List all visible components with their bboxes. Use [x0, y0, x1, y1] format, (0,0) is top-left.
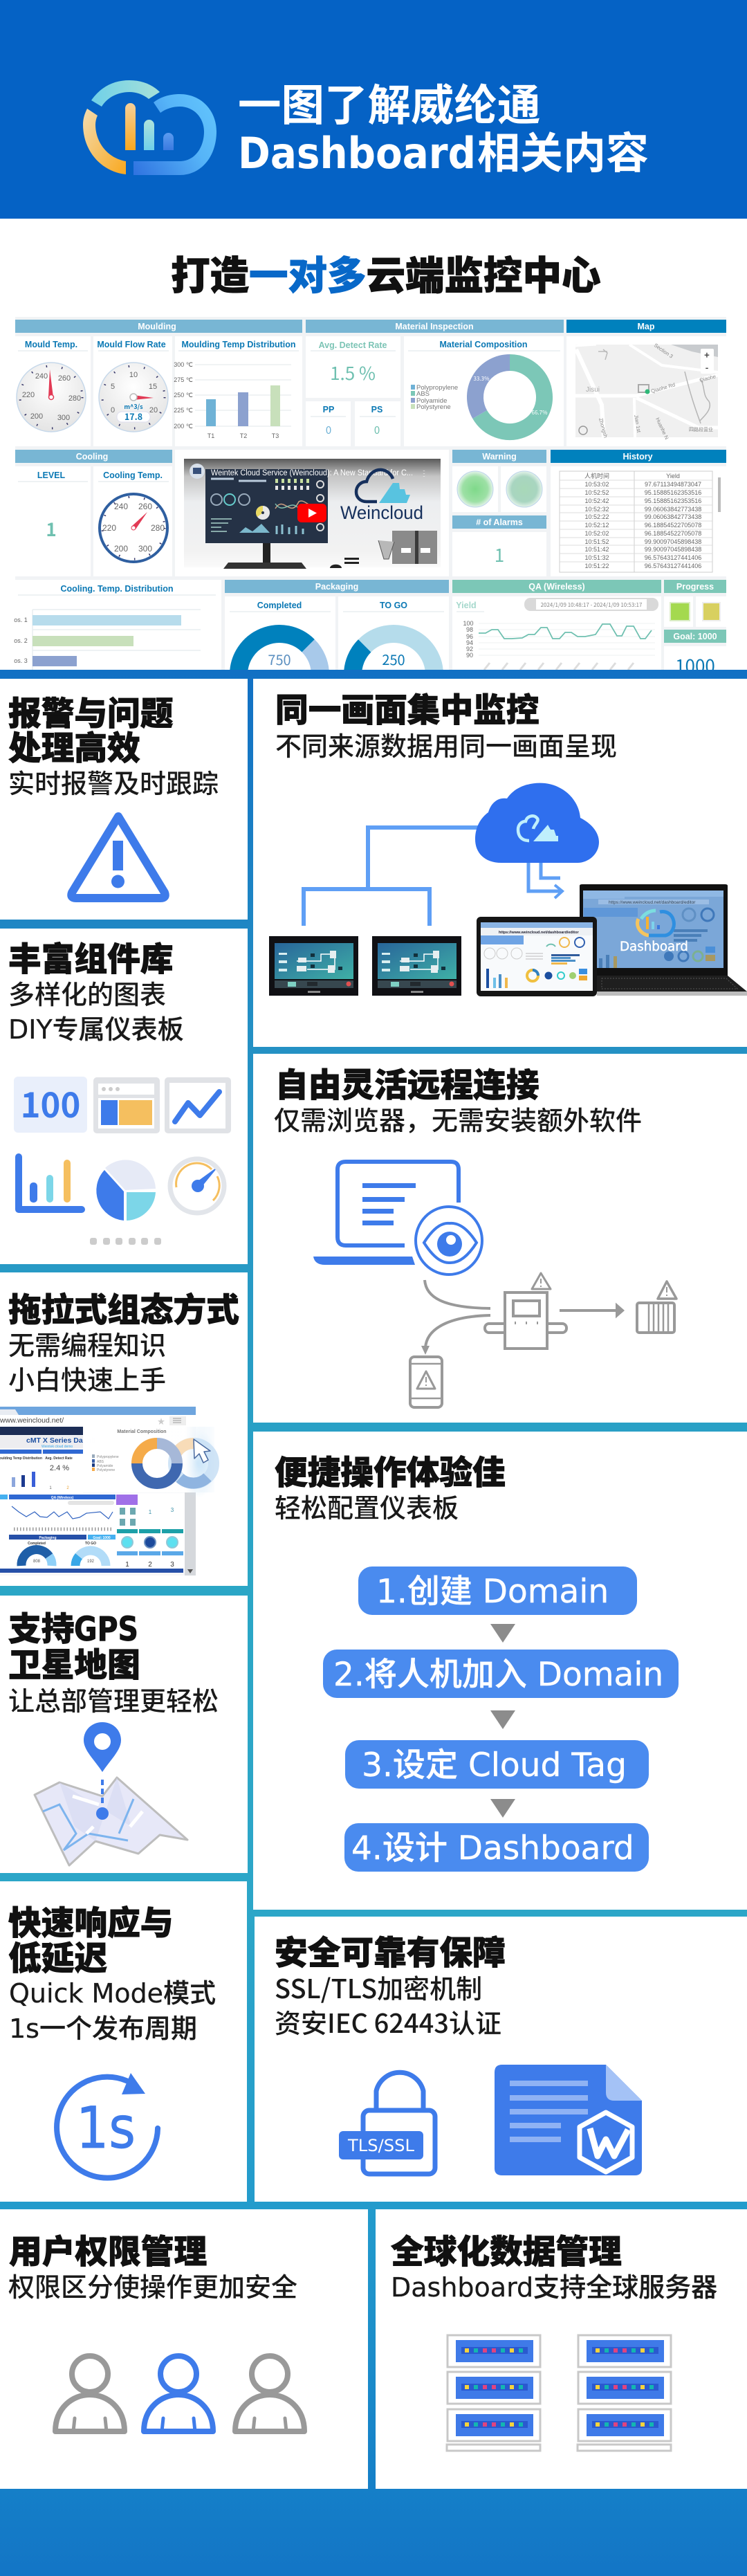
cell titles: Material Composition	[439, 340, 528, 349]
line chart: QA yield	[463, 598, 658, 670]
panel: GPS map	[0, 1596, 248, 1873]
browser screenshot: Weintek cloud demo	[42, 1445, 73, 1449]
history table: 95.15885162353516	[645, 489, 701, 496]
heading: 报警与问题	[8, 687, 173, 735]
icon: warning triangle	[71, 816, 165, 898]
heading: 便捷操作体验佳	[275, 1446, 506, 1494]
warning lights: 1	[495, 542, 504, 567]
floating popup: material composition	[83, 1427, 218, 1498]
history table: 10:51:22	[584, 563, 609, 569]
history table	[560, 471, 721, 572]
bar chart: moulding temp	[174, 361, 291, 439]
cell titles	[18, 340, 560, 612]
icon: line widget	[165, 1077, 231, 1133]
gauge: cooling temp: 300	[138, 544, 152, 554]
heading: 低延迟	[8, 1932, 107, 1980]
bar chart: moulding temp: 200 ℃	[174, 423, 193, 430]
bar chart: moulding temp: 300 ℃	[174, 361, 193, 368]
gauge: mould temp: 280	[68, 394, 81, 403]
subtext	[8, 974, 184, 1045]
video thumbnail: Weintek Cloud Service (Weincloud): A New Standard for C...	[211, 469, 413, 477]
line chart: QA yield: 92	[466, 646, 473, 652]
cell titles: Moulding Temp Distribution	[181, 340, 296, 349]
cell titles: Cooling Temp.	[103, 471, 163, 480]
level value: 1	[46, 516, 57, 542]
line chart: QA yield: 96	[466, 633, 473, 640]
icon: users	[55, 2356, 304, 2431]
browser screenshot: 2	[148, 1561, 152, 1569]
title: Dashboard	[238, 128, 476, 179]
progress: 1000	[675, 652, 715, 678]
cell titles: Cooling. Temp. Distribution	[61, 584, 173, 594]
bar chart: cooling temp distribution: os. 1	[14, 616, 28, 623]
line chart: QA yield: 98	[466, 626, 473, 633]
floating popup: material composition: Polyamide	[97, 1464, 113, 1468]
panel: drag and drop	[0, 1272, 248, 1586]
history table: 10:51:32	[584, 554, 609, 561]
progress	[670, 603, 720, 678]
history table: 10:53:02	[584, 481, 609, 488]
cell titles: Mould Temp.	[25, 340, 77, 349]
line chart: QA yield: 94	[466, 639, 473, 646]
browser screenshot: 1	[49, 1486, 52, 1490]
gauges: packaging: 750	[268, 649, 291, 669]
cell titles: PP	[323, 405, 334, 414]
step 1	[358, 1566, 637, 1615]
browser screenshot: Completed	[28, 1542, 46, 1546]
history table: 96.57643127441406	[645, 563, 701, 569]
browser screenshot: 808	[33, 1560, 41, 1564]
browser screenshot: Avg. Detect Rate	[45, 1456, 73, 1461]
gauge: flow rate: m^3/s	[124, 402, 143, 411]
step 3: 3.设定 Cloud Tag	[362, 1746, 627, 1784]
history table: 96.18854522705078	[645, 530, 701, 537]
history table: 10:52:02	[584, 530, 609, 537]
heading: 全球化数据管理	[391, 2225, 622, 2273]
donut: material composition: Polypropylene	[416, 384, 458, 392]
gauge: flow rate: 17.8	[124, 410, 142, 423]
heading	[8, 1602, 140, 1686]
cell titles: PS	[371, 405, 382, 414]
subtext: 让总部管理更轻松	[8, 1680, 219, 1718]
laptop: https://www.weincloud.net/dashboard/editor	[609, 900, 696, 905]
map: Zhongsh	[598, 417, 609, 439]
donut: material composition: ABS	[416, 390, 430, 398]
browser screenshot: 3	[171, 1507, 174, 1513]
detect rate values	[326, 367, 379, 434]
browser screenshot: 1	[149, 1509, 152, 1515]
subtext: 资安IEC 62443认证	[275, 2002, 501, 2040]
bar chart: moulding temp: 275 ℃	[174, 376, 193, 383]
history table: 10:52:52	[584, 489, 609, 496]
line chart: QA yield: 90	[466, 652, 473, 659]
map: Qiaohe Rd	[650, 381, 676, 394]
history table: 96.18854522705078	[645, 522, 701, 529]
browser screenshot: 2.4 %	[50, 1464, 69, 1472]
subtext	[8, 1324, 166, 1397]
gauge: cooling temp: 240	[114, 502, 128, 511]
map: Huanhe N	[654, 417, 670, 440]
bar chart: moulding temp: 250 ℃	[174, 392, 193, 399]
laptop logo and label	[620, 911, 688, 954]
panel: low latency	[0, 1881, 247, 2202]
floating popup: material composition: Material Composition	[117, 1429, 167, 1434]
browser screenshot: Packaging	[39, 1536, 57, 1540]
floating popup: material composition: Polystyrene	[97, 1468, 115, 1472]
panel: component library	[0, 929, 248, 1264]
bar chart: cooling temp distribution	[14, 610, 201, 670]
browser screenshot: 3	[170, 1561, 174, 1569]
gauge: flow rate: 0	[111, 406, 115, 414]
icon: cloud logo	[83, 80, 216, 175]
dashboard headers: Moulding	[138, 322, 176, 331]
icon: TLS lock	[339, 2072, 435, 2174]
heading: 自由灵活远程连接	[275, 1059, 540, 1106]
gauge: mould temp: 200	[30, 412, 43, 421]
browser screenshot: www.weincloud.net/	[0, 1416, 64, 1425]
history table: 96.57643127441406	[645, 554, 701, 561]
gauge: cooling temp: 280	[151, 523, 165, 533]
bar chart: cooling temp distribution: os. 2	[14, 637, 28, 644]
history table: 10:52:12	[584, 522, 609, 529]
map	[574, 342, 718, 440]
cell titles: Avg. Detect Rate	[319, 340, 387, 350]
browser screenshot: TO GO	[85, 1542, 96, 1546]
browser screenshot: ★	[158, 1416, 165, 1427]
icon: one second timer: 1s	[76, 2094, 136, 2162]
history table: 95.15885162353516	[645, 497, 701, 504]
dashboard headers: Map	[638, 322, 655, 331]
panel: global data	[376, 2209, 747, 2489]
icon: gray device network	[410, 1273, 676, 1407]
pagination dots	[90, 1238, 161, 1245]
browser screenshot: 2	[66, 1486, 69, 1490]
gauge: flow rate: 15	[149, 383, 157, 391]
gauge: cooling temp	[100, 494, 167, 562]
title	[238, 70, 649, 181]
floating popup: material composition: Polypropylene	[97, 1455, 119, 1459]
bar chart: moulding temp: T2	[240, 432, 247, 439]
dashboard headers: QA (Wireless)	[528, 582, 585, 592]
map: -	[706, 360, 709, 374]
floating popup: material composition: ABS	[97, 1460, 104, 1464]
gauge: mould temp: 240	[35, 372, 48, 381]
browser screenshot	[0, 1407, 218, 1575]
dashboard headers: Warning	[482, 452, 517, 462]
heading	[8, 687, 173, 769]
arrow	[490, 1710, 515, 1729]
panel: user permissions	[0, 2209, 368, 2489]
browser screenshot: cMT X Series Dashb	[26, 1436, 95, 1445]
detect rate values: 0	[374, 423, 380, 437]
gauge: cooling temp: 260	[138, 502, 152, 511]
panel: alarm handling	[0, 679, 248, 920]
panel: same-screen monitoring	[253, 679, 747, 1047]
cell titles: TO GO	[380, 601, 407, 610]
donut: material composition: 33.3%	[474, 375, 490, 383]
icon: TLS lock: TLS/SSL	[347, 2136, 415, 2155]
icon: servers	[447, 2335, 671, 2451]
arrow	[490, 1799, 515, 1818]
dashboard cells	[15, 336, 726, 670]
heading: 用户权限管理	[9, 2225, 207, 2273]
cell titles: Mould Flow Rate	[97, 340, 166, 349]
history table: 10:52:22	[584, 513, 609, 520]
donut: material composition: Polystyrene	[416, 403, 451, 411]
bar chart: moulding temp: 225 ℃	[174, 407, 193, 414]
heading: 支持	[8, 1602, 74, 1650]
subtext: DIY专属仪表板	[8, 1014, 184, 1045]
history table: 99.06063842773438	[645, 506, 701, 513]
map: Jisui	[586, 386, 600, 394]
dashboard headers	[15, 320, 726, 643]
dashboard headers: # of Alarms	[476, 518, 523, 527]
gauge: mould temp	[17, 363, 86, 432]
heading: 拖拉式组态方式	[8, 1284, 239, 1331]
map: 四路段营业	[689, 426, 713, 433]
tablet: https://www.weincloud.net/dashboard/editor	[499, 931, 579, 935]
section: dashboard showcase	[0, 219, 747, 678]
gauge: mould temp: 220	[22, 391, 35, 399]
line chart: QA yield: 100	[463, 620, 474, 627]
map: Qiaohe	[699, 373, 717, 383]
video thumbnail	[184, 459, 441, 569]
step 1: 1.创建 Domain	[376, 1573, 609, 1611]
dashboard headers: Packaging	[315, 582, 358, 592]
laptop	[580, 884, 747, 996]
heading: 同一画面集中监控	[275, 684, 540, 731]
heading: one-to-many monitoring: 打造一对多云端监控中心	[171, 244, 600, 301]
dashboard screenshot	[14, 317, 726, 678]
step 2: 2.将人机加入 Domain	[333, 1656, 663, 1694]
detect rate values: 1.5 %	[330, 360, 376, 385]
tablet	[477, 917, 597, 996]
HMI panels	[269, 936, 461, 996]
line chart: QA yield: 2024/1/09 10:48:17 - 2024/1/09 10:53:17	[541, 601, 643, 609]
subtext: 多样化的图表	[8, 974, 166, 1012]
browser screenshot: Goal: 1000	[93, 1536, 111, 1540]
subtext: 无需编程知识	[8, 1324, 166, 1362]
history table: Yield	[666, 473, 680, 479]
dashboard headers: Cooling	[76, 452, 108, 462]
detect rate values: 0	[326, 423, 331, 437]
map: Jian 1st	[633, 414, 643, 434]
map: Section 3	[653, 342, 674, 360]
gauges: packaging: 250	[382, 649, 405, 669]
gauge: flow rate: 5	[111, 383, 115, 391]
subtext: 轻松配置仪表板	[275, 1487, 459, 1525]
subtext: Quick Mode模式	[9, 1978, 216, 2009]
history table: 10:52:32	[584, 506, 609, 513]
subtext: 仅需浏览器，无需安装额外软件	[274, 1099, 642, 1138]
cell titles: Yield	[456, 601, 477, 610]
heading: 处理高效	[8, 722, 140, 769]
dashboard headers: Material Inspection	[395, 322, 474, 331]
title: 一图了解威纶通	[238, 70, 541, 133]
subtext: 实时报警及时跟踪	[8, 762, 219, 801]
history table: 10:51:52	[584, 538, 609, 545]
browser screenshot: QA (Wireless)	[51, 1496, 74, 1500]
history table: 97.67113494873047	[645, 481, 701, 488]
heading	[8, 1897, 173, 1980]
cell titles: Completed	[257, 601, 302, 610]
gauge: flow rate	[99, 363, 168, 432]
icon: bar chart	[19, 1157, 82, 1209]
subtext: Dashboard支持全球服务器	[391, 2272, 717, 2303]
subtext: 权限区分使操作更加安全	[8, 2266, 297, 2304]
donut: material composition: 66.7%	[532, 409, 548, 417]
bar chart: moulding temp: T3	[272, 432, 279, 439]
map: +	[704, 348, 710, 361]
icon: location pin	[84, 1722, 121, 1820]
step 4: 4.设计 Dashboard	[351, 1829, 634, 1867]
icon: number widget: 100	[21, 1079, 80, 1128]
warning lights	[457, 471, 542, 567]
gauge: flow rate: 10	[129, 371, 138, 379]
icon: certificate document	[495, 2065, 642, 2175]
arrow	[490, 1624, 515, 1643]
browser screenshot: 192	[87, 1560, 95, 1564]
bar chart: cooling temp distribution: os. 3	[14, 657, 28, 664]
gauges: packaging	[239, 634, 434, 675]
browser screenshot: 1	[125, 1561, 129, 1569]
subtext: 不同来源数据用同一画面呈现	[275, 725, 617, 763]
bar chart: moulding temp: T1	[208, 432, 214, 439]
icon: one second timer	[54, 2073, 160, 2180]
history table: 10:52:42	[584, 497, 609, 504]
gauge: mould temp: 300	[57, 414, 70, 422]
icon: window widget	[93, 1077, 160, 1133]
history table: 99.90097045898438	[645, 538, 701, 545]
history table: 99.90097045898438	[645, 546, 701, 553]
gauge: cooling temp: 220	[102, 523, 116, 533]
subtext	[9, 1978, 216, 2044]
dashboard headers: History	[622, 452, 653, 462]
subtext: 小白快速上手	[8, 1359, 166, 1397]
subtext: 1s一个发布周期	[9, 2013, 197, 2044]
laptop logo and label: Dashboard	[620, 940, 688, 954]
title: 相关内容	[477, 118, 649, 181]
icon: laptop with eye	[313, 1162, 482, 1275]
heading: 安全可靠有保障	[275, 1926, 506, 1974]
panel: remote connection	[253, 1054, 747, 1423]
panel: easy operation	[253, 1432, 747, 1910]
dashboard headers: Goal: 1000	[673, 632, 717, 641]
history table: 人机时间	[584, 471, 609, 480]
heading: 快速响应与	[8, 1897, 173, 1944]
history table: 99.06063842773438	[645, 513, 701, 520]
subtext: SSL/TLS加密机制	[275, 1968, 482, 2006]
gauge: mould temp: 260	[58, 374, 71, 383]
gauge: cooling temp: 200	[114, 544, 128, 554]
history table: 10:51:42	[584, 546, 609, 553]
cell titles: LEVEL	[37, 471, 65, 480]
subtext	[275, 1968, 501, 2040]
icon: map	[35, 1778, 187, 1865]
donut: material composition: Polyamide	[416, 397, 447, 405]
video thumbnail: Weincloud	[340, 502, 423, 523]
donut: material composition	[411, 363, 548, 432]
icon: pie chart	[96, 1160, 156, 1221]
heading: GPS	[74, 1611, 138, 1649]
icon: gauge	[170, 1159, 224, 1213]
header banner	[0, 0, 747, 219]
gauge: flow rate: 20	[149, 406, 158, 414]
step 3	[345, 1740, 649, 1789]
heading: 卫星地图	[8, 1638, 140, 1686]
connection arrows	[304, 821, 562, 926]
icon: cloud	[475, 783, 599, 863]
heading: 丰富组件库	[8, 933, 173, 980]
panel: security	[255, 1917, 747, 2202]
dashboard headers: Progress	[676, 582, 714, 592]
